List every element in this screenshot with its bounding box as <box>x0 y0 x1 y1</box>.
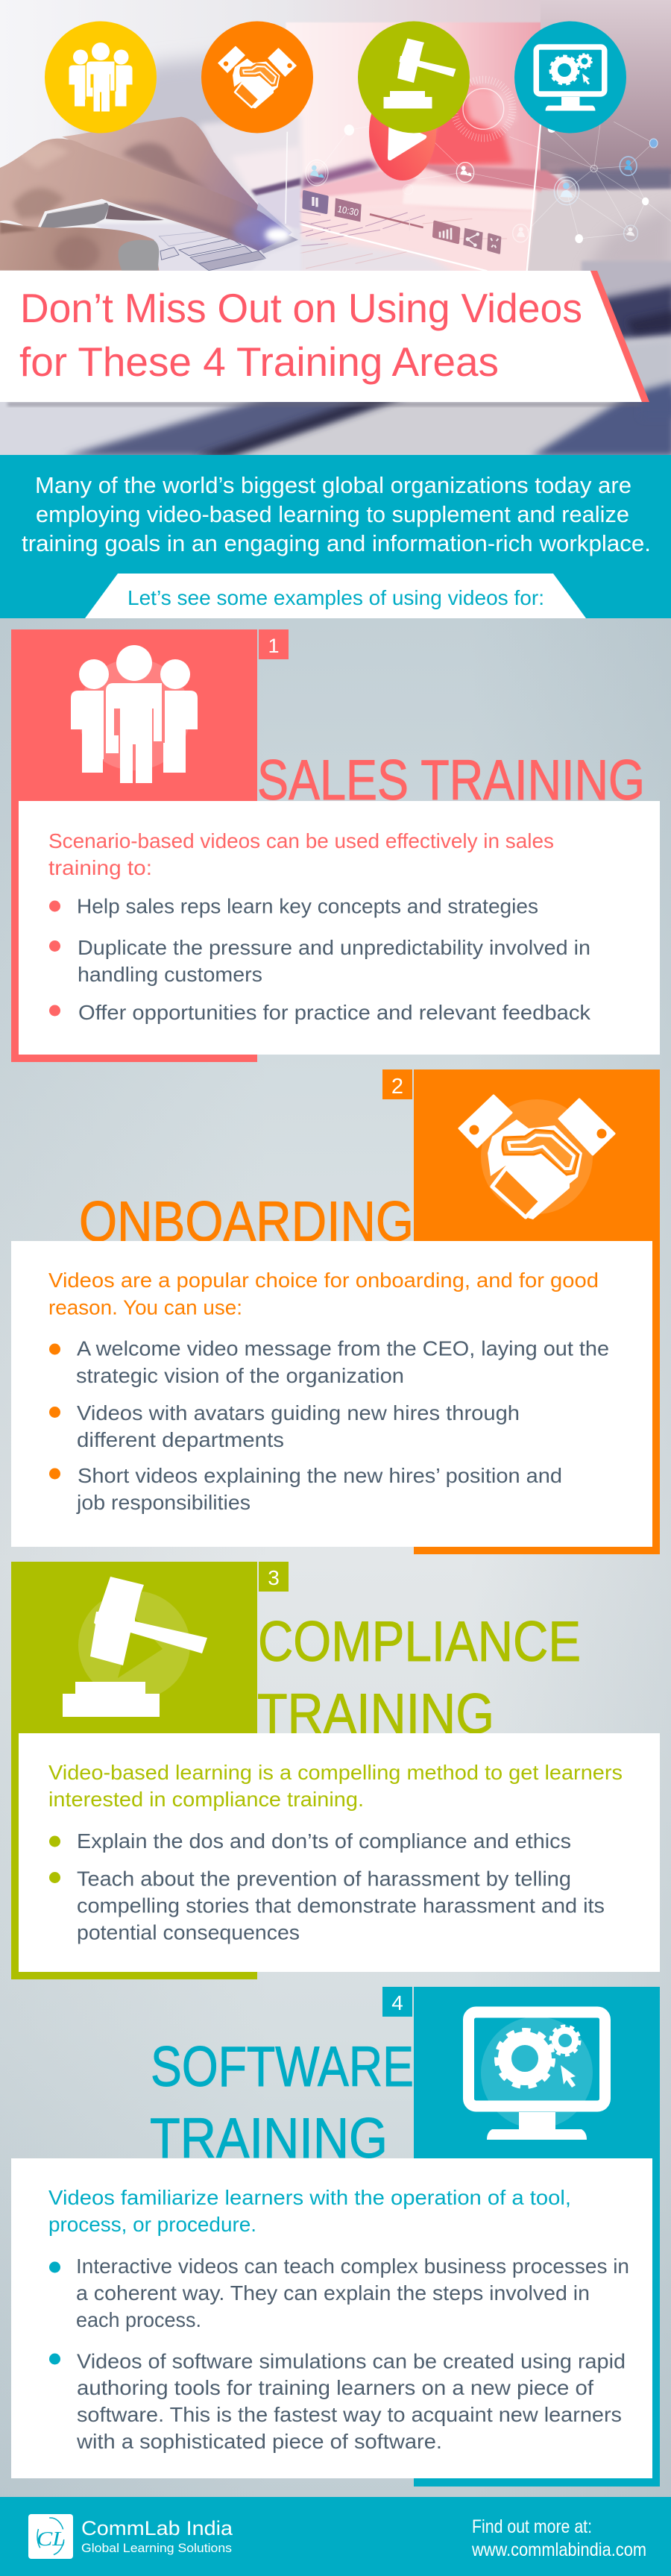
shadow gap between fingers <box>40 203 110 229</box>
number 4: 4 <box>391 1991 403 2014</box>
logo: CommLab India <box>28 2514 233 2559</box>
logo: CommLab India: Global Learning Solutions <box>81 2541 232 2555</box>
blurred bands right of banner <box>581 260 671 300</box>
intro paragraph: employing video-based learning to supplement and realize <box>36 501 629 527</box>
text card <box>11 1241 652 1547</box>
text card: Videos are a popular choice for onboarding, and for good <box>48 1269 599 1292</box>
number 1: 1 <box>268 635 280 657</box>
title text: Don’t Miss Out on Using Videos <box>20 285 582 331</box>
blurred laptop bands below banner <box>0 395 671 455</box>
icon circle: handshake <box>201 21 313 133</box>
text card: Scenario-based videos can be used effectively in sales <box>48 829 554 852</box>
logo: CommLab India: CommLab India <box>81 2517 233 2539</box>
text card <box>11 2158 652 2478</box>
text card: job responsibilities <box>76 1491 251 1514</box>
text card: Short videos explaining the new hires’ position and <box>78 1464 562 1487</box>
text card: with a sophisticated piece of software. <box>76 2430 442 2453</box>
text card: authoring tools for training learners on a new piece of <box>77 2376 593 2399</box>
left part of photo: hand on keyboard <box>0 114 300 274</box>
text card: Videos with avatars guiding new hires through <box>77 1401 520 1424</box>
intro paragraph <box>22 472 651 556</box>
heading: onboarding: ONBOARDING <box>79 1190 414 1254</box>
title text: for These 4 Training Areas <box>19 339 499 385</box>
text card: handling customers <box>78 963 262 986</box>
text card <box>19 1733 660 1972</box>
icon box: monitor <box>414 1987 660 2487</box>
text card: potential consequences <box>77 1921 300 1944</box>
sun ring badge <box>454 80 513 138</box>
thumb <box>0 222 159 271</box>
text card: software. This is the fastest way to acquaint new learners <box>77 2403 622 2426</box>
number 1 <box>259 629 289 659</box>
text card: each process. <box>76 2308 201 2331</box>
index finger and back of hand <box>0 139 291 251</box>
text card: compelling stories that demonstrate harassment and its <box>77 1894 605 1917</box>
website call to action: Find out more at: <box>472 2516 592 2537</box>
title banner <box>0 271 649 402</box>
text card: Explain the dos and don’ts of compliance and ethics <box>77 1829 571 1853</box>
text card: Videos of software simulations can be created using rapid <box>77 2349 626 2373</box>
panel 2: onboarding <box>11 1069 660 1554</box>
number 3: 3 <box>268 1566 280 1589</box>
fingertip glow <box>233 216 283 246</box>
number 2: 2 <box>391 1075 403 1099</box>
text card: Interactive videos can teach complex business processes in <box>76 2255 629 2278</box>
keyboard key lines <box>298 211 507 268</box>
heading: compliance training <box>257 1610 581 1746</box>
white tab with lead-in <box>85 574 586 618</box>
heading: software training: SOFTWARE <box>151 2035 414 2099</box>
keyboard <box>253 186 300 233</box>
heading: compliance training: TRAINING <box>257 1683 494 1746</box>
network lines <box>317 122 671 239</box>
text card: Duplicate the pressure and unpredictability involved in <box>78 936 590 959</box>
icon box: gavel <box>11 1562 257 1979</box>
website call to action: www.commlabindia.com <box>471 2539 646 2560</box>
text card: strategic vision of the organization <box>76 1364 404 1387</box>
icon box: people <box>11 629 257 1062</box>
text card: Video-based learning is a compelling method to get learners <box>48 1761 623 1784</box>
text card: Help sales reps learn key concepts and strategies <box>77 895 538 917</box>
number 3 <box>259 1562 289 1592</box>
heading: software training <box>150 2035 414 2170</box>
right part of photo: video glass panel, laptop, network: 10:30 <box>336 204 359 218</box>
hero photo: hand typing on a laptop with video interface <box>0 0 671 456</box>
number 2 <box>382 1069 412 1099</box>
title text <box>19 285 582 385</box>
text card: training to: <box>48 856 152 879</box>
text card: Videos familiarize learners with the operation of a tool, <box>48 2186 571 2209</box>
glass frame lines <box>298 125 541 271</box>
logo: CommLab India: CL <box>37 2528 66 2550</box>
white frame vertical <box>286 132 287 224</box>
white tab with lead-in: Let’s see some examples of using videos for: <box>127 586 544 609</box>
text card: interested in compliance training. <box>48 1788 364 1811</box>
text card <box>19 801 660 1055</box>
right part of photo: video glass panel, laptop, network <box>286 0 671 274</box>
network nodes <box>306 157 637 242</box>
intro paragraph: Many of the world’s biggest global organizations today are <box>35 472 631 498</box>
panel 3: compliance training <box>11 1562 660 1979</box>
icon circle: people <box>45 21 157 133</box>
text card: a coherent way. They can explain the steps involved in <box>76 2281 590 2305</box>
icon circle: gavel <box>358 21 470 133</box>
glittery nail <box>119 240 159 271</box>
number 4 <box>382 1987 412 2017</box>
text card: process, or procedure. <box>48 2213 256 2236</box>
panel 4: software training <box>11 1987 660 2487</box>
intro band <box>0 455 671 618</box>
text card: Teach about the prevention of harassment by telling <box>77 1867 571 1890</box>
text card: reason. You can use: <box>48 1296 242 1319</box>
text card: A welcome video message from the CEO, laying out the <box>77 1336 609 1360</box>
website call to action <box>471 2516 646 2560</box>
icon circle: software monitor <box>514 21 626 133</box>
text card: Offer opportunities for practice and relevant feedback <box>78 1001 591 1024</box>
text card: different departments <box>77 1428 284 1451</box>
middle finger <box>62 117 291 233</box>
icon box: handshake <box>414 1069 660 1554</box>
footer <box>0 2497 671 2576</box>
page background <box>0 618 671 2505</box>
panel 1: sales training <box>11 629 660 1062</box>
heading: compliance training: COMPLIANCE <box>258 1610 581 1674</box>
play button <box>369 113 436 180</box>
intro paragraph: training goals in an engaging and information-rich workplace. <box>22 530 651 556</box>
video control buttons <box>302 190 329 214</box>
heading: software training: TRAINING <box>150 2107 388 2170</box>
